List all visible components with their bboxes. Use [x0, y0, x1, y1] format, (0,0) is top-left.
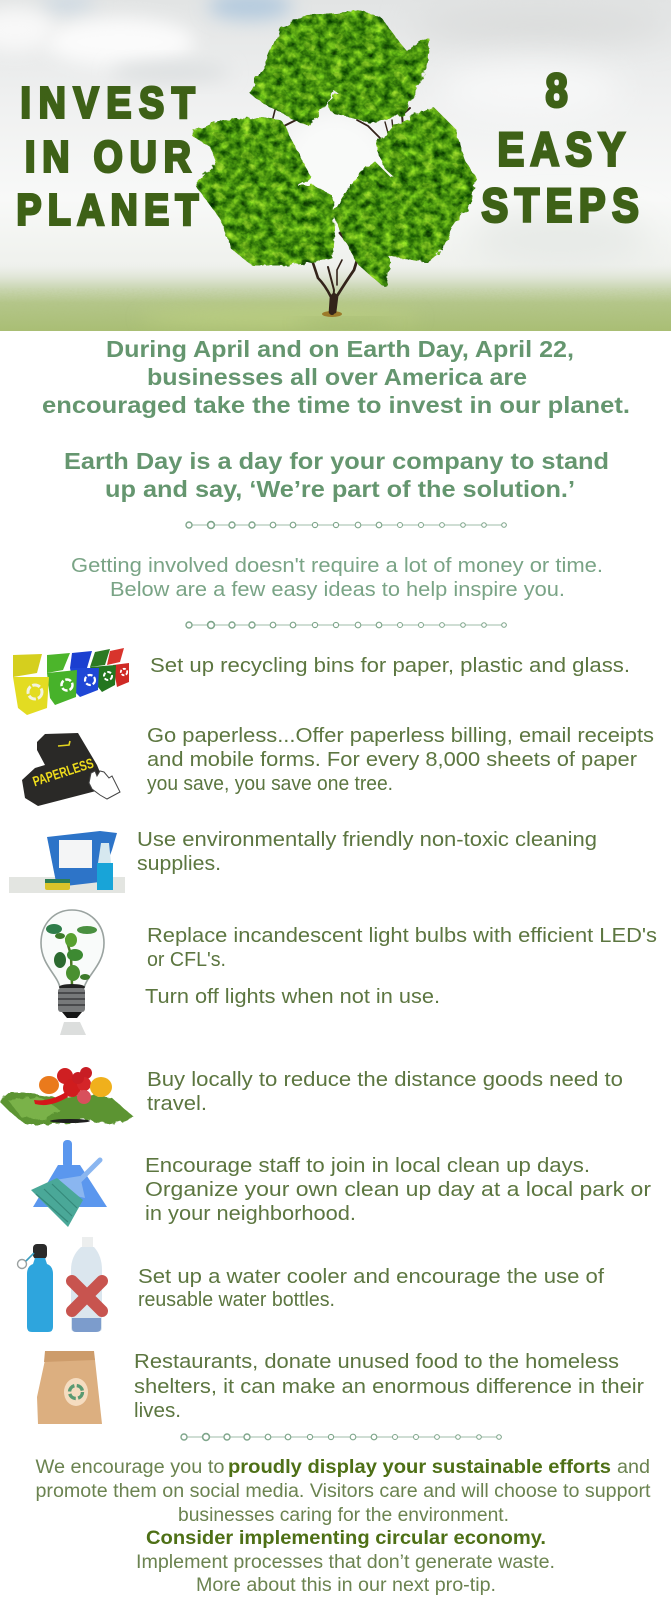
intro subtext: getting involved: Below are a few easy ideas to help inspire you.: [110, 579, 565, 601]
step 7: reusable bottles: [18, 1237, 604, 1332]
closing message: proudly display your sustainable efforts: [228, 1457, 611, 1478]
step 1: recycling bins: [13, 648, 630, 715]
intro text: Earth Day message: businesses all over America are: [147, 364, 527, 390]
heading: 8 easy steps: 8: [546, 66, 568, 117]
step 7 text: Set up a water cooler and encourage the use of: [138, 1266, 604, 1288]
step 2 text: [147, 725, 654, 795]
closing message: More about this in our next pro-tip.: [196, 1575, 496, 1596]
heading: Invest in our planet: INVEST: [20, 78, 195, 127]
intro text: Earth Day message: During April and on Earth Day, April 22,: [106, 336, 574, 362]
step 2: go paperless: [22, 725, 654, 806]
intro text: Earth Day message: Earth Day is a day for your company to stand: [64, 448, 609, 474]
step 7 text: reusable water bottles.: [138, 1289, 335, 1311]
step 6 text: Organize your own clean up day at a local park or: [145, 1179, 651, 1201]
step 5 text: Buy locally to reduce the distance goods need to: [147, 1069, 623, 1091]
icon: vegetables: [0, 1067, 135, 1124]
canopy arrow: right: [335, 110, 473, 283]
sky background: [0, 0, 671, 276]
step 8 text: [134, 1351, 644, 1422]
step 2 text: Go paperless...Offer paperless billing, email receipts: [147, 725, 654, 747]
icon: tree trunk and branches: [273, 106, 410, 317]
heading: Invest in our planet: [16, 78, 198, 234]
step 3 text: [137, 829, 597, 875]
icon: plastic bottle crossed out: [71, 1237, 102, 1332]
step 6 text: [145, 1155, 651, 1225]
step 4 text: Turn off lights when not in use.: [145, 986, 440, 1008]
intro text: Earth Day message: [42, 336, 630, 502]
closing message: [36, 1457, 651, 1596]
step 6 text: in your neighborhood.: [145, 1203, 356, 1225]
step 5 text: travel.: [147, 1093, 207, 1115]
icon: cleaning bucket: [9, 831, 125, 893]
closing message: We encourage you to: [36, 1457, 224, 1478]
step 5: buy locally: [0, 1067, 623, 1124]
step 8 text: lives.: [134, 1400, 181, 1422]
step 4 text: [145, 925, 657, 1008]
step 3: non-toxic cleaning: [9, 829, 597, 893]
step 7 text: [138, 1266, 604, 1311]
closing message: promote them on social media. Visitors care and will choose to support: [36, 1481, 651, 1502]
intro subtext: getting involved: Getting involved doesn't require a lot of money or time.: [71, 555, 603, 577]
step 4: efficient lighting: [41, 910, 657, 1035]
closing message: businesses caring for the environment.: [178, 1505, 509, 1526]
step 8 text: Restaurants, donate unused food to the homeless: [134, 1351, 619, 1373]
step 4 text: or CFL's.: [147, 949, 226, 971]
icon: paper bag with recycle mark: [37, 1351, 102, 1424]
canopy arrow: top: [253, 13, 427, 123]
intro text: Earth Day message: encouraged take the time to invest in our planet.: [42, 392, 630, 418]
step 8: donate food: [37, 1351, 644, 1424]
icon: light bulb with plant: [41, 910, 104, 1035]
heading: Invest in our planet: IN OUR: [25, 132, 191, 181]
canopy arrow: left: [195, 120, 332, 263]
icon: reusable aluminium bottle: [18, 1244, 53, 1332]
step 4 text: Replace incandescent light bulbs with efficient LED's: [147, 925, 657, 947]
grass field: [0, 271, 671, 331]
step 1 text: Set up recycling bins for paper, plastic and glass.: [150, 655, 630, 677]
step 6: clean up days: [31, 1140, 651, 1227]
heading: 8 easy steps: EASY: [498, 125, 625, 176]
heading: 8 easy steps: STEPS: [482, 181, 639, 232]
icon: recycling bins: [13, 648, 129, 715]
icon: paperless key: PAPERLESS: [31, 755, 95, 789]
icon: recycling symbol tree canopy: [195, 13, 473, 283]
heading: 8 easy steps: [482, 66, 639, 232]
step 5 text: [147, 1069, 623, 1115]
closing message: Consider implementing circular economy.: [146, 1528, 546, 1549]
step 8 text: shelters, it can make an enormous difference in their: [134, 1376, 644, 1398]
icon: paperless key: [22, 733, 120, 806]
intro text: Earth Day message: up and say, ‘We’re part of the solution.’: [105, 476, 575, 502]
step 3 text: supplies.: [137, 853, 221, 875]
icon: dustpan and brush: [31, 1140, 107, 1227]
step 2 text: you save, you save one tree.: [147, 773, 393, 795]
heading: Invest in our planet: PLANET: [16, 185, 198, 234]
step 3 text: Use environmentally friendly non-toxic cleaning: [137, 829, 597, 851]
step 6 text: Encourage staff to join in local clean up days.: [145, 1155, 590, 1177]
step 2 text: and mobile forms. For every 8,000 sheets of paper: [147, 749, 637, 771]
closing message: Implement processes that don’t generate waste.: [136, 1552, 555, 1573]
hero banner: [0, 0, 671, 331]
intro subtext: getting involved: [71, 555, 603, 601]
closing message: and: [617, 1457, 650, 1478]
